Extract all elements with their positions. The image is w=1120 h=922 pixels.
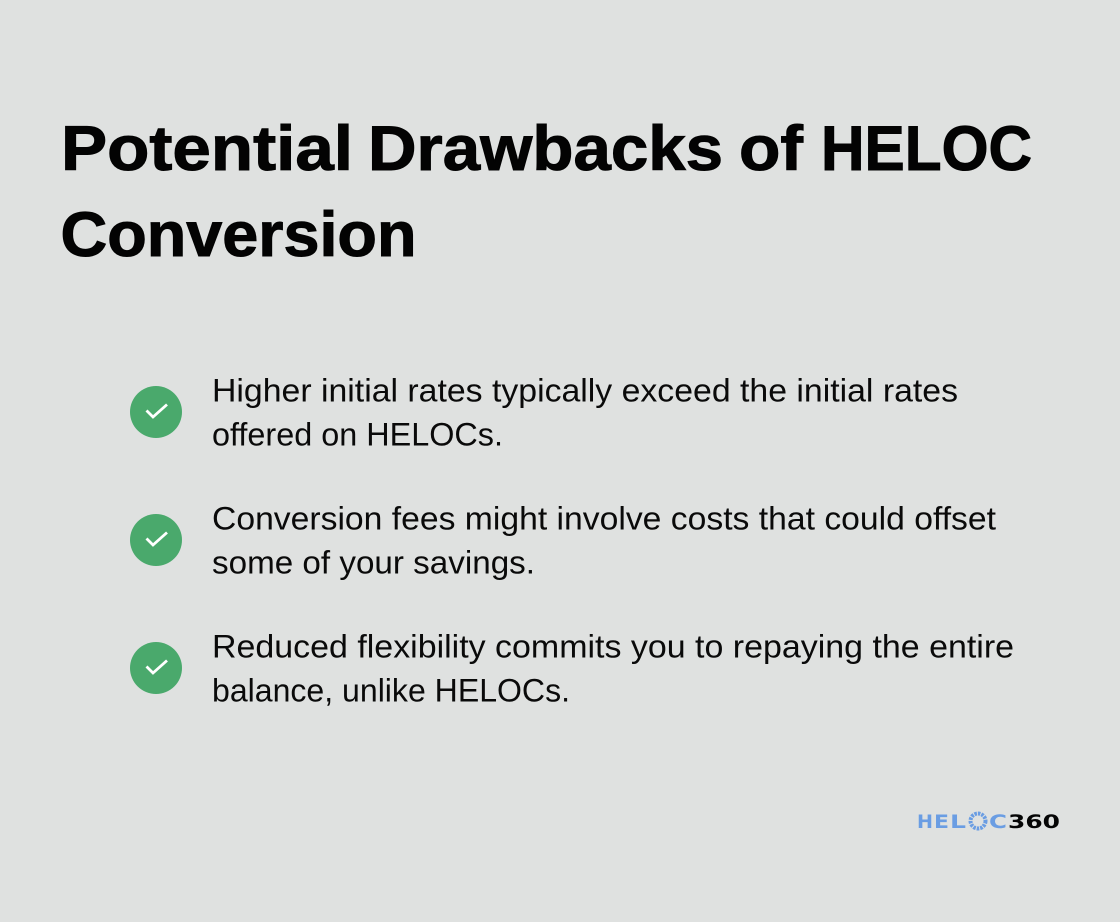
logo: HELOC360: L (950, 811, 966, 833)
title (60, 114, 1032, 270)
icon: green check circle (130, 642, 182, 694)
title: of (739, 114, 804, 184)
text: higher initial rates: Higher initial rates typically exceed the initial rates (212, 372, 958, 408)
list item: reduced flexibility (130, 628, 1014, 708)
logo: HELOC360 (917, 811, 1060, 833)
text: conversion fees: some of your savings. (212, 544, 535, 580)
text: conversion fees: Conversion fees might involve costs that could offset (212, 500, 996, 536)
icon: green check circle (130, 386, 182, 438)
logo: HELOC360: C (989, 811, 1007, 833)
logo: HELOC360: E (934, 811, 949, 833)
icon: green check circle (130, 514, 182, 566)
title: HELOC (821, 114, 1032, 184)
text: higher initial rates: offered on HELOCs. (212, 416, 503, 452)
text: conversion fees (212, 500, 996, 580)
title: Conversion (60, 200, 416, 270)
logo: HELOC360: H (917, 811, 933, 833)
text: reduced flexibility: Reduced flexibility commits you to repaying the entire (212, 628, 1014, 664)
list item: higher initial rates (130, 372, 958, 452)
icon: logo swirl (970, 814, 986, 828)
list item: conversion fees (130, 500, 996, 580)
title: Drawbacks (368, 114, 723, 184)
text: higher initial rates (212, 372, 958, 452)
text: reduced flexibility: balance, unlike HELOCs. (212, 672, 570, 708)
text: reduced flexibility (212, 628, 1014, 708)
logo: HELOC360: 360 (1008, 811, 1060, 833)
title: Potential (61, 114, 353, 184)
